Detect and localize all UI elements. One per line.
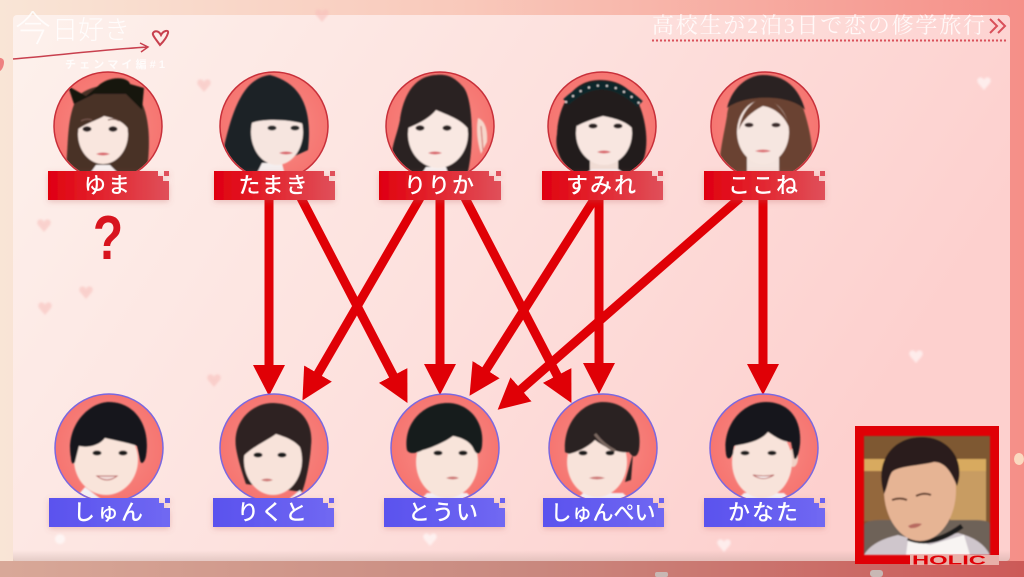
- channel watermark strip: [910, 555, 999, 565]
- name label: しゅんぺい: しゅんぺい: [550, 502, 656, 525]
- commentator video: [864, 436, 990, 555]
- portrait: ここね: [711, 72, 819, 182]
- channel watermark: HOLIC: [912, 552, 987, 568]
- name label: たまき: たまき: [238, 173, 310, 198]
- arrows: [269, 198, 763, 392]
- person: りくと: [213, 394, 334, 527]
- person: すみれ: [542, 72, 663, 200]
- name label: しゅん: しゅん: [73, 500, 145, 525]
- person: かなた: [704, 394, 825, 527]
- arrow: りりか to りくと: [316, 198, 420, 377]
- header caption: 高校生が2泊3日で恋の修学旅行: [652, 13, 985, 38]
- arrow: ここね to とうい: [518, 198, 740, 392]
- name label: りくと: りくと: [237, 500, 309, 525]
- person: しゅん: [49, 394, 170, 527]
- portrait: とうい: [391, 394, 499, 502]
- header chevrons: [990, 19, 1005, 33]
- person: ゆま: [48, 72, 169, 200]
- portrait: すみれ: [548, 72, 656, 180]
- arrow: たまき to りくと: [264, 198, 274, 369]
- name label: ここね: ここね: [728, 173, 800, 198]
- arrow: たまき to とうい: [301, 198, 395, 379]
- portrait: しゅん: [55, 394, 163, 502]
- arrow: りりか to とうい: [436, 198, 444, 368]
- portrait: かなた: [710, 394, 818, 502]
- portrait: たまき: [220, 72, 328, 180]
- person: しゅんぺい: [543, 394, 664, 527]
- logo subtitle: チェンマイ編#1: [65, 57, 165, 71]
- name label: すみれ: すみれ: [566, 173, 638, 198]
- person: たまき: [214, 72, 335, 200]
- logo arrow: [13, 43, 148, 59]
- name label: ゆま: ゆま: [84, 173, 132, 198]
- logo heart: [153, 31, 168, 45]
- header dotted rule: [652, 40, 1007, 42]
- portrait: ゆま: [54, 72, 162, 180]
- portrait: しゅんぺい: [549, 394, 657, 502]
- logo: 今日好き チェンマイ編#1: [13, 8, 168, 71]
- person: とうい: [384, 394, 505, 527]
- arrow: すみれ to とうい: [484, 198, 595, 373]
- logo: 今日好き チェンマイ編#1: 日好き: [52, 15, 130, 45]
- arrow: ここね to かなた: [758, 198, 768, 368]
- name label: かなた: かなた: [728, 500, 800, 525]
- arrow: すみれ to しゅんぺい: [594, 198, 604, 367]
- person: りりか: [379, 72, 501, 200]
- commentator frame: [855, 426, 999, 564]
- portrait: りりか: [386, 72, 494, 180]
- name label: とうい: とうい: [408, 500, 480, 525]
- portrait: りくと: [220, 394, 328, 502]
- picture-in-picture: commentator: [855, 426, 999, 568]
- question mark: ?: [93, 203, 123, 272]
- person: ここね: [704, 72, 825, 200]
- arrow: りりか to しゅんぺい: [465, 198, 559, 379]
- logo: 今日好き チェンマイ編#1: 今: [15, 8, 51, 49]
- name label: りりか: りりか: [404, 173, 476, 198]
